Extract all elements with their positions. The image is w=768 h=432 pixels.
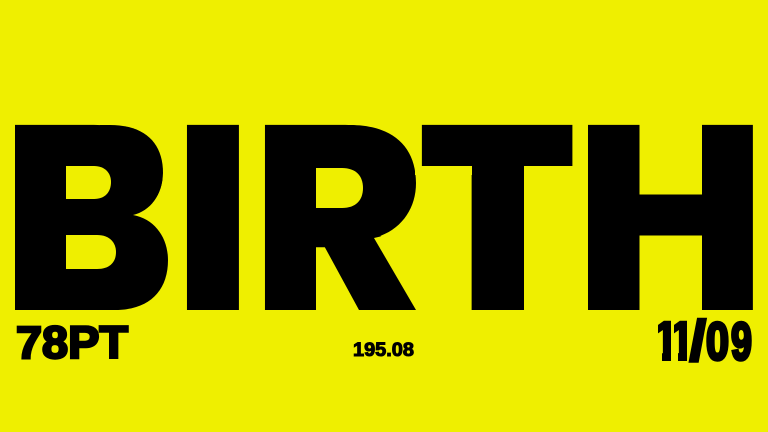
letter H: H bbox=[582, 84, 759, 351]
label: 11/09: 0 bbox=[706, 313, 729, 372]
letter B: B bbox=[9, 82, 169, 351]
letter R: R bbox=[260, 82, 410, 351]
letter I: I bbox=[181, 83, 245, 351]
label: 11/09: 1 bbox=[668, 311, 696, 373]
title: BIRTH bbox=[9, 82, 759, 352]
label: 11/09: 9 bbox=[731, 311, 752, 371]
label: 11/09: / bbox=[690, 309, 706, 372]
label: 195.08: 195.08 bbox=[353, 340, 414, 361]
label: 78PT: 78PT bbox=[16, 317, 128, 368]
label: 11/09 bbox=[648, 309, 752, 373]
letter T: T bbox=[429, 84, 565, 352]
label: 11/09: 1 bbox=[652, 311, 680, 373]
